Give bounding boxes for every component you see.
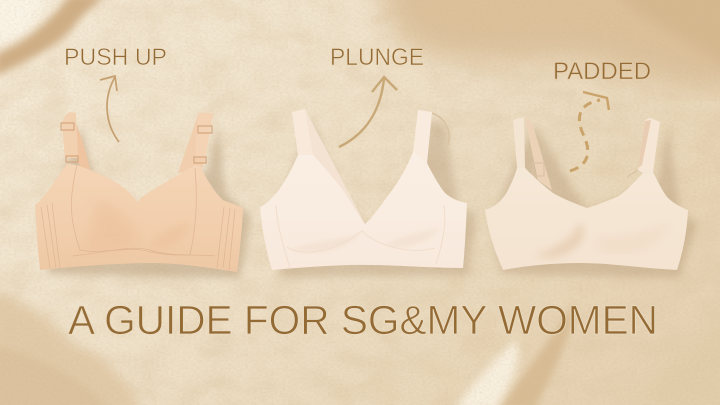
bra: padded [485, 117, 697, 278]
bra shadow [280, 118, 476, 277]
back strap loop [432, 113, 449, 145]
cups and band [35, 164, 243, 272]
cup shading [82, 200, 140, 252]
bra shadow [45, 125, 251, 278]
straps [178, 115, 205, 173]
bra: push up [35, 112, 251, 278]
seams [276, 205, 445, 268]
label: Plunge: PLUNGE [330, 44, 424, 71]
title: A GUIDE FOR SG&MY WOMEN [68, 297, 658, 343]
bra: plunge [260, 109, 476, 277]
straps [525, 118, 552, 190]
arrow: Plunge [339, 77, 397, 147]
bra shadow [490, 125, 697, 278]
cup shading [290, 228, 440, 252]
cups and band [260, 152, 467, 270]
arrow: Padded [570, 92, 609, 171]
sliders and hooks [61, 123, 212, 163]
seams [41, 165, 235, 270]
straps [292, 109, 364, 224]
cup shading [535, 222, 584, 258]
label: Push Up: PUSH UP [64, 44, 167, 71]
label: Padded: PADDED [553, 58, 651, 85]
cups and band [485, 168, 688, 270]
clasps [533, 163, 638, 177]
arrow: Push Up [100, 76, 119, 142]
